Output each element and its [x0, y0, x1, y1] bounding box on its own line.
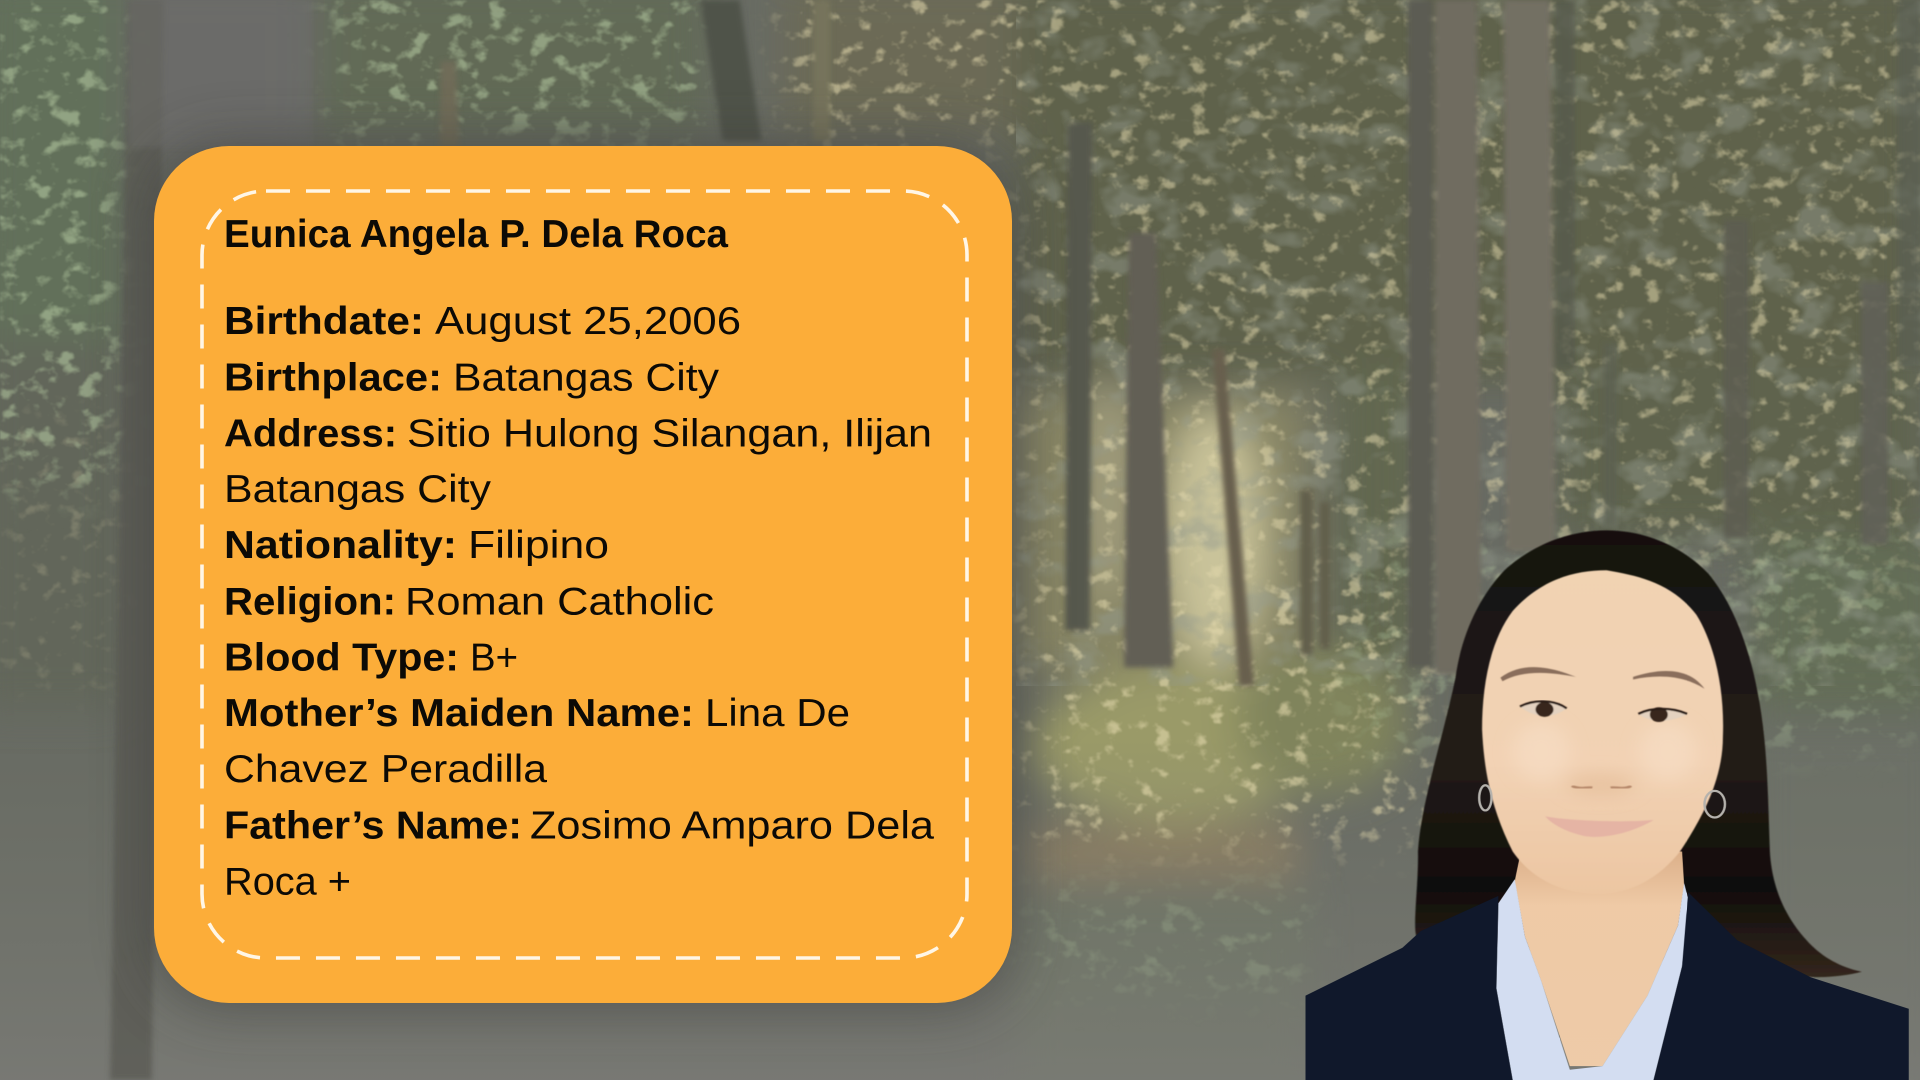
- religion: Roman Catholic: [405, 580, 714, 624]
- lips: [1545, 816, 1654, 837]
- name heading: Eunica Angela P. Dela Roca: [224, 213, 728, 256]
- neck: [1515, 852, 1684, 1066]
- religion: [224, 580, 714, 624]
- blazer: [1305, 892, 1909, 1080]
- blood type: Blood Type:: [224, 636, 459, 680]
- lower fade: [0, 735, 1920, 1080]
- blood type: B+: [470, 636, 518, 680]
- birthdate: [224, 300, 741, 343]
- information card: [154, 146, 1012, 1003]
- father's name: Roca +: [224, 860, 351, 904]
- address: Address:: [224, 412, 397, 456]
- dark foliage mass: [1016, 0, 1920, 686]
- cheek shading: [1513, 722, 1696, 796]
- card background: [154, 146, 1012, 1003]
- religion: Religion:: [224, 580, 396, 624]
- father's name: Father’s Name:: [224, 804, 522, 848]
- card shadow: [150, 142, 1016, 1008]
- nationality: Filipino: [468, 524, 609, 567]
- nationality: [224, 524, 609, 567]
- portrait of the student: [1305, 530, 1909, 1080]
- mother's maiden name: [224, 692, 850, 791]
- mother's maiden name: Mother’s Maiden Name:: [224, 692, 694, 735]
- birthdate: August 25,2006: [435, 300, 741, 343]
- hair: [1415, 530, 1862, 977]
- address: Sitio Hulong Silangan, Ilijan: [407, 412, 932, 456]
- face: [1482, 570, 1723, 894]
- earrings: [1479, 785, 1725, 817]
- address: Batangas City: [224, 468, 492, 511]
- birthdate: Birthdate:: [224, 300, 424, 343]
- birthplace: Birthplace:: [224, 356, 442, 400]
- address: [224, 412, 932, 511]
- father's name: Zosimo Amparo Dela: [530, 804, 934, 848]
- dashed border: [202, 191, 967, 958]
- mother's maiden name: Chavez Peradilla: [224, 748, 547, 791]
- birthplace: [224, 356, 720, 400]
- eyes: [1520, 701, 1687, 722]
- father's name: [224, 804, 934, 904]
- eyebrows: [1500, 667, 1576, 681]
- nose: [1572, 786, 1631, 788]
- birthplace: Batangas City: [453, 356, 720, 400]
- shirt collar: [1496, 879, 1690, 1080]
- mother's maiden name: Lina De: [705, 692, 850, 735]
- nationality: Nationality:: [224, 524, 457, 567]
